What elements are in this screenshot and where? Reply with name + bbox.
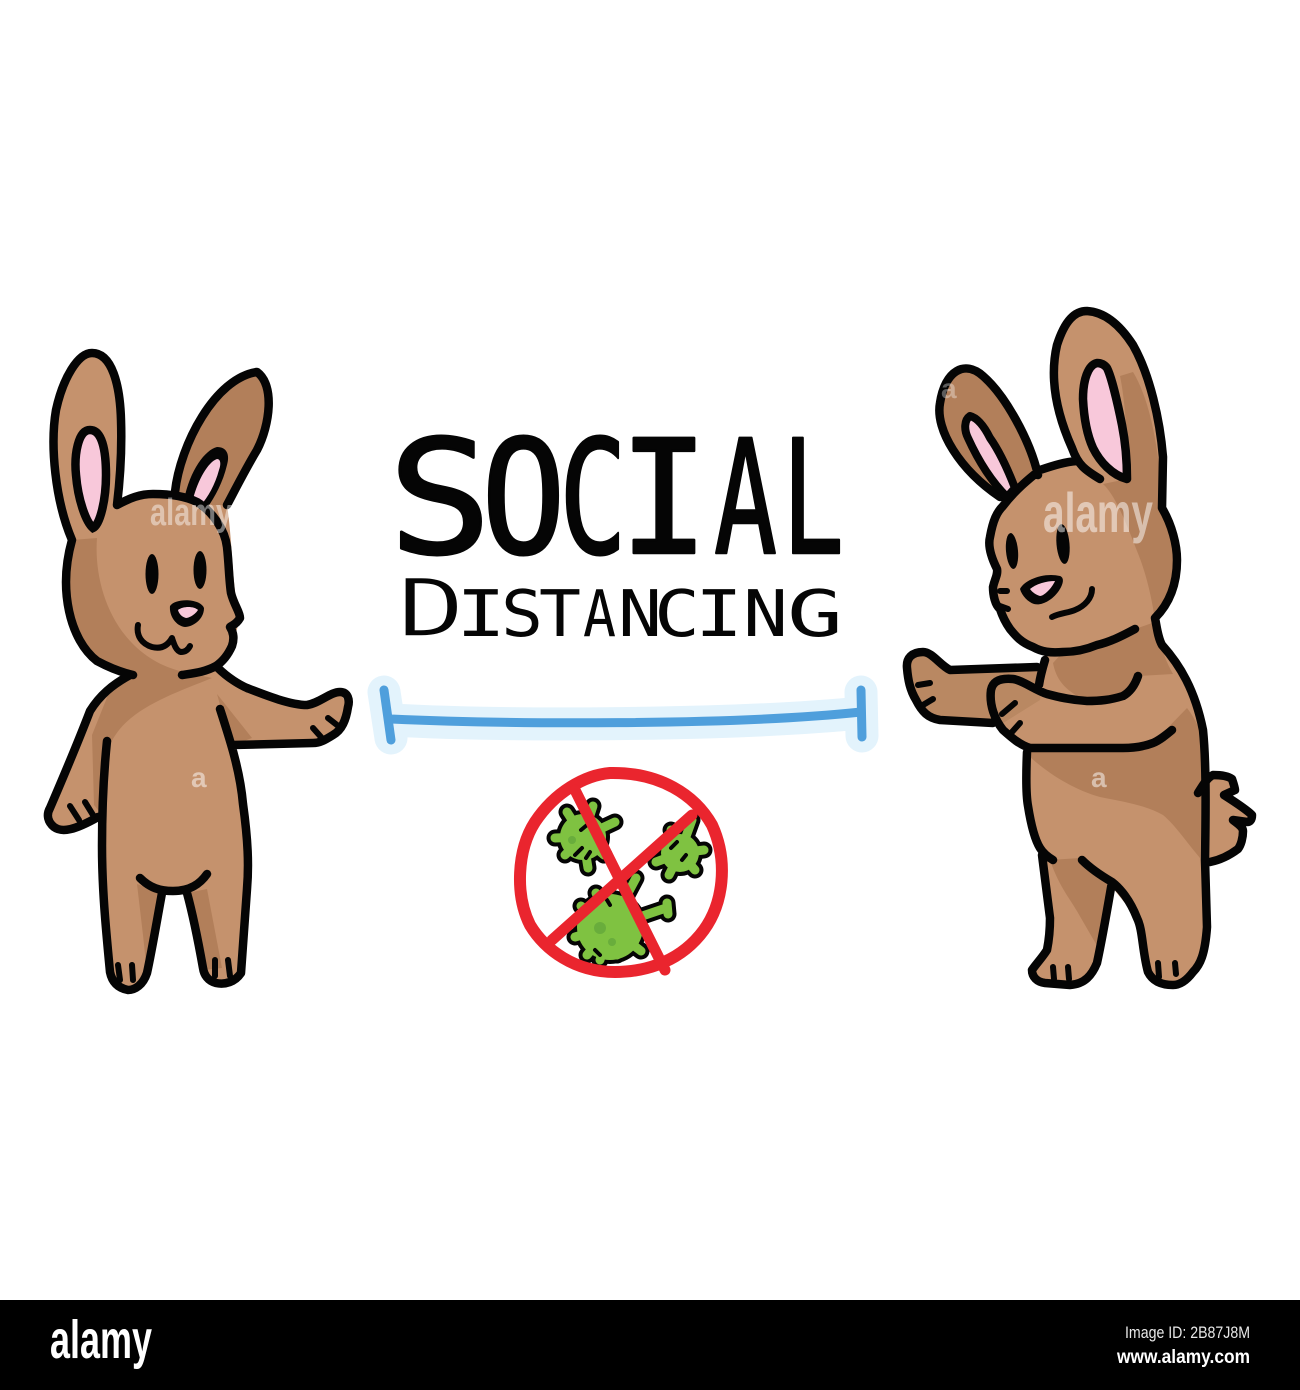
left rabbit limb shading bbox=[137, 694, 252, 973]
virus dashes bbox=[575, 825, 686, 955]
right rabbit outlines bbox=[907, 311, 1207, 985]
footer url: www.alamy.com bbox=[1116, 1347, 1250, 1368]
watermark left: alamy bbox=[150, 492, 232, 534]
left rabbit eyes bbox=[146, 551, 206, 594]
right rabbit fill silhouette bbox=[990, 311, 1207, 985]
right rabbit bbox=[907, 311, 1252, 985]
red prohibition sign bbox=[520, 773, 722, 972]
no virus sign bbox=[520, 773, 722, 972]
subtitle: distancing: I bbox=[695, 578, 743, 652]
right rabbit tail outline bbox=[1198, 775, 1252, 862]
subtitle: distancing: S bbox=[501, 578, 543, 652]
distance marker halo bbox=[384, 692, 862, 738]
title: social: L bbox=[782, 407, 844, 591]
virus body outlines bbox=[556, 810, 703, 964]
virus bottom fill bbox=[575, 878, 668, 960]
virus bottom outline bbox=[575, 878, 668, 960]
title: social: A bbox=[714, 407, 777, 591]
footer background bbox=[0, 1300, 1300, 1390]
subtitle: distancing: I bbox=[456, 578, 506, 652]
left rabbit far inner ear bbox=[184, 447, 228, 508]
virus body fills bbox=[560, 814, 699, 960]
red cross bbox=[552, 790, 692, 970]
virus top right fill bbox=[656, 820, 704, 875]
virus top left outline bbox=[555, 806, 615, 868]
left rabbit fingers and toes bbox=[70, 718, 337, 980]
right rabbit back arm fill bbox=[907, 652, 1045, 725]
subtitle: distancing: N bbox=[743, 578, 788, 652]
virus top left fill bbox=[555, 806, 615, 868]
right rabbit leg shading bbox=[1050, 858, 1112, 950]
right rabbit far ear fill bbox=[939, 369, 1038, 497]
right rabbit mouth bbox=[1052, 589, 1092, 617]
left rabbit near inner ear bbox=[76, 430, 106, 528]
watermark ear a: a bbox=[941, 373, 957, 404]
left rabbit nose pink bbox=[178, 607, 198, 618]
footer logo: alamy bbox=[50, 1310, 152, 1370]
title: social: I bbox=[619, 407, 709, 591]
watermark left a: a bbox=[191, 762, 207, 793]
right rabbit eyes bbox=[1004, 524, 1071, 569]
left rabbit fill silhouette bbox=[48, 353, 348, 990]
virus fills bbox=[555, 806, 704, 960]
subtitle: distancing: A bbox=[583, 578, 616, 652]
subtitle: distancing: C bbox=[654, 578, 700, 652]
left rabbit far ear shading bbox=[175, 372, 269, 505]
left rabbit far ear pink bbox=[193, 459, 220, 505]
right rabbit small inner ear bbox=[965, 416, 1015, 497]
right rabbit shading bbox=[1103, 372, 1174, 620]
left rabbit mouth bbox=[138, 625, 190, 652]
right rabbit nose bbox=[1020, 575, 1063, 604]
subtitle: distancing: D bbox=[397, 562, 465, 655]
title: social: C bbox=[559, 407, 627, 591]
footer image id: Image ID: 2B87J8M bbox=[1125, 1323, 1250, 1342]
watermark right: alamy bbox=[1043, 481, 1153, 544]
distance marker bbox=[384, 690, 862, 740]
watermarks bbox=[150, 373, 1153, 793]
right rabbit fingers, toes and whiskers bbox=[918, 591, 1176, 979]
watermark right a: a bbox=[1091, 762, 1107, 793]
subtitle: distancing: N bbox=[618, 578, 662, 652]
left rabbit outline bbox=[48, 353, 349, 990]
distance marker line bbox=[384, 690, 862, 740]
footer bar bbox=[0, 1300, 1300, 1390]
right rabbit chest shading bbox=[1053, 622, 1173, 701]
virus top right outline bbox=[656, 820, 704, 875]
virus spots bbox=[568, 836, 616, 946]
virus outlines bbox=[555, 806, 704, 964]
subtitle: distancing: G bbox=[787, 578, 843, 652]
title: social: S bbox=[388, 407, 492, 591]
left rabbit nose bbox=[170, 600, 204, 627]
red circle bbox=[520, 773, 722, 972]
subtitle: distancing: T bbox=[539, 578, 581, 652]
right rabbit belly shading bbox=[1030, 708, 1205, 858]
right rabbit nose pink bbox=[1030, 581, 1055, 596]
right rabbit big inner ear bbox=[1083, 363, 1127, 479]
right rabbit tail fill bbox=[1198, 775, 1252, 862]
left rabbit bbox=[48, 353, 349, 990]
title: social: O bbox=[481, 407, 566, 591]
left rabbit shading bbox=[66, 538, 212, 815]
